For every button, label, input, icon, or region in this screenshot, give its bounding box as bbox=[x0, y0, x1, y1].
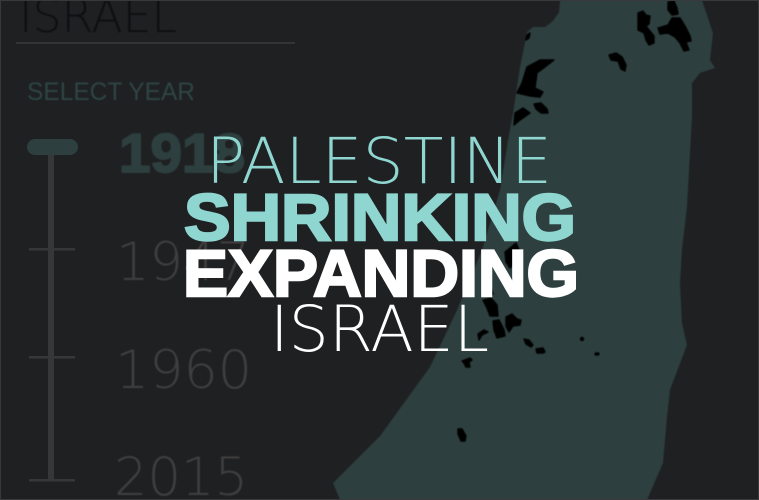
main title bbox=[183, 125, 579, 366]
map: land area with blocks bbox=[333, 0, 715, 500]
slider handle bbox=[27, 139, 78, 155]
year labels bbox=[114, 122, 252, 500]
settlement blobs bbox=[458, 1, 691, 441]
year 1947: 1947 bbox=[116, 232, 250, 293]
year 1918 selected: 1918 bbox=[119, 122, 245, 184]
divider bbox=[16, 42, 295, 44]
title line: ISRAEL: ISRAEL bbox=[270, 293, 489, 366]
title line: EXPANDING: EXPANDING bbox=[183, 236, 579, 310]
year 1960: 1960 bbox=[115, 340, 252, 401]
title line: SHRINKING: SHRINKING bbox=[184, 180, 576, 254]
label: select year: SELECT YEAR bbox=[27, 78, 195, 106]
year slider bbox=[27, 139, 78, 482]
title line: PALESTINE: PALESTINE bbox=[206, 125, 552, 198]
